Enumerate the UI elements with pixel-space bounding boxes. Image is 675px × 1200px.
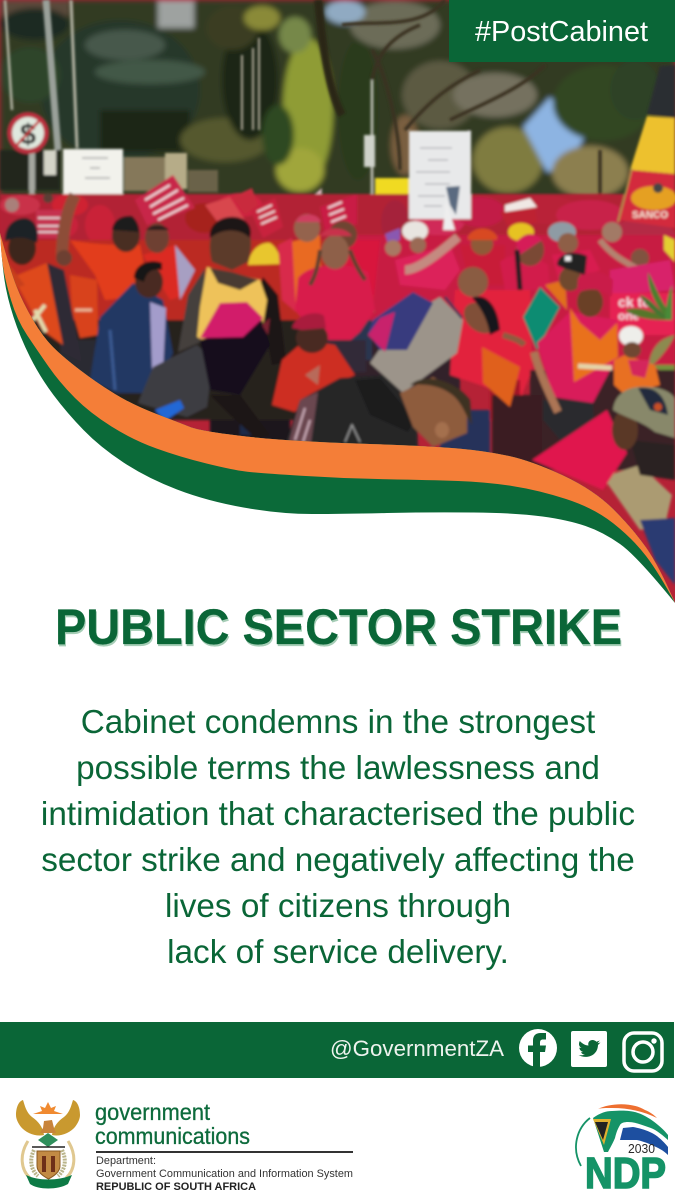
white placard left [63,149,123,197]
body text: possible terms the lawlessness and [76,750,600,787]
body text: lives of citizens through [165,888,511,925]
spears [32,1146,65,1148]
yellow placard [373,176,411,196]
icon: instagram [624,1033,662,1071]
yellow hat [248,243,282,265]
ribbon [26,1175,72,1188]
logo text: government communications: government [95,1099,211,1125]
orange arc [598,1104,657,1118]
logo: coat of arms [16,1100,80,1188]
body text: Cabinet condemns in the strongest [81,704,595,741]
logo text: government communications [95,1099,353,1193]
far crowd [0,191,674,240]
crowd: left [0,240,340,420]
mid crowd: right: ck to [618,294,651,310]
person: red shirt behind boy [143,223,195,300]
protea [38,1133,58,1147]
logo text: government communications: communications [95,1123,250,1149]
hashtag banner: #PostCabinet [475,16,648,48]
body text [41,704,635,971]
orange wave [0,233,675,603]
person: teal jacket [523,253,587,350]
blue band [620,1127,668,1155]
hashtag banner [449,0,675,62]
plant leaves [624,272,675,372]
green ring [576,1118,590,1166]
tusks [22,1141,74,1178]
shield [37,1151,60,1179]
SANCO flag [618,65,675,228]
person: white cap orange vest [614,326,660,395]
mid crowd: right [329,221,675,420]
social bar [0,1022,674,1078]
person: man in pink shirt with camo cap [532,387,675,585]
logo text: government communications: Department: [96,1155,156,1167]
person: pink shirt woman [295,228,375,372]
photo detail: poles, trunks, signs [0,0,675,585]
person: woman in yellow vest [178,217,286,365]
green wave [0,233,675,603]
wings [16,1100,44,1136]
body text: sector strike and negatively affecting the [41,842,635,879]
handle: @GovernmentZA [330,1036,504,1061]
person: orange shirt [278,214,322,312]
icon: twitter [571,1031,607,1067]
person: hoodie [285,375,418,450]
sun [33,1102,63,1114]
2030: 2030 [628,1141,655,1156]
red placards [135,175,357,238]
dark lower crowd [210,360,675,470]
gold triangle [593,1119,611,1145]
SANCO flag: SANCO [632,210,668,221]
person: woman orange vest right [534,272,618,440]
icon: facebook [519,1029,557,1067]
logo: NDP 2030 [576,1104,668,1198]
person: boy in blue jacket [90,261,173,393]
logo text: government communications: Government Communication and Information System [96,1168,353,1180]
black triangle [595,1122,608,1140]
person: far-left vest [4,216,78,347]
body text: intimidation that characterised the public [41,796,635,833]
large white placard [409,131,471,230]
person: seated woman in red [272,313,355,412]
logo text: government communications: REPUBLIC OF SOUTH AFRICA [96,1181,256,1193]
light placards [278,195,307,218]
person: man in grey jacket with backpack [368,292,524,393]
title: PUBLIC SECTOR STRIKE [55,599,622,655]
green band [593,1111,668,1152]
bird [40,1120,56,1133]
person: orange vest centre [482,347,520,407]
person: kneeling in grey with pink hat [138,302,270,438]
wheat [31,1150,65,1176]
mid crowd: right: one [618,309,640,323]
person: bald man [400,377,472,447]
street sign [5,110,51,196]
person: raised arm [56,195,150,338]
photo: protest crowd [0,0,675,610]
photo background: trees and sky [0,0,675,200]
body text: lack of service delivery. [167,934,509,971]
street sign: $ [20,119,36,151]
